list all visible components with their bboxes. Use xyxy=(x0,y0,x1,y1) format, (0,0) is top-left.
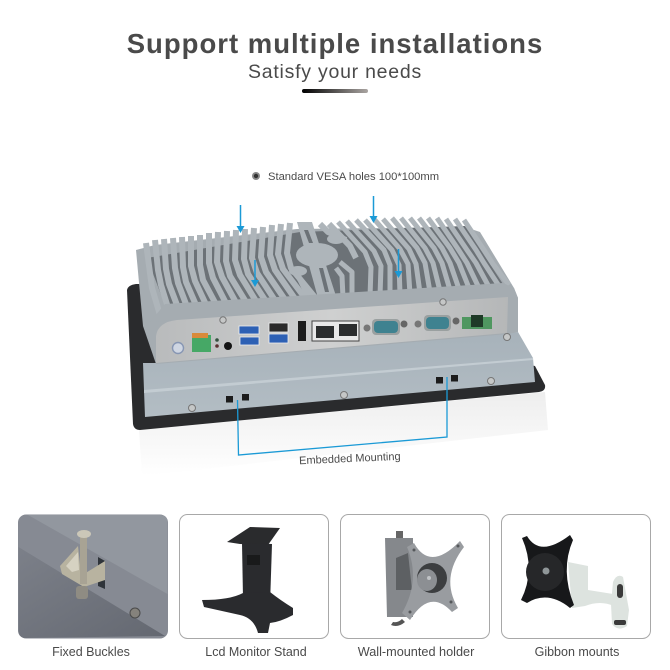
arrow 2 xyxy=(370,196,378,223)
arrows: VESA holes xyxy=(236,196,402,287)
LEDs xyxy=(215,338,219,348)
arrow 4 xyxy=(394,249,402,278)
VESA text: Standard VESA holes 100*100mm xyxy=(268,171,439,183)
embedded mounting callout xyxy=(238,377,447,467)
VESA callout label xyxy=(252,171,439,183)
panel: wall-mounted holder xyxy=(340,514,490,659)
card xyxy=(340,514,490,638)
I/O ports xyxy=(172,315,492,354)
black bezel xyxy=(127,284,545,430)
caption: Gibbon mounts xyxy=(535,645,619,659)
icon: wall bracket xyxy=(385,531,464,626)
central heatsink spine and oval xyxy=(289,222,345,298)
DC connector xyxy=(462,315,492,329)
heatsink fins xyxy=(146,223,356,315)
bracket line xyxy=(238,377,447,455)
card photo xyxy=(18,514,168,638)
card xyxy=(502,514,650,638)
power button xyxy=(172,342,184,354)
screws xyxy=(188,299,510,412)
panel: gibbon mounts xyxy=(502,514,650,659)
floor reflection xyxy=(139,392,548,476)
USB blue ports xyxy=(239,326,288,345)
subtitle: Satisfy your needs xyxy=(248,61,422,83)
caption: Fixed Buckles xyxy=(52,645,130,659)
icon: VESA hole bullet xyxy=(252,172,260,180)
COM ports xyxy=(364,315,460,335)
icon: buckle xyxy=(60,530,140,618)
audio jack xyxy=(224,342,232,350)
icon: articulated arm xyxy=(521,535,629,629)
HDMI port xyxy=(298,321,306,341)
LAN ports xyxy=(312,321,359,341)
title: Support multiple installations xyxy=(127,28,543,59)
arrow 1 xyxy=(236,205,244,233)
card xyxy=(180,514,328,638)
rear plate xyxy=(143,332,535,417)
heatsink fins, right half xyxy=(297,218,509,300)
silver I/O panel xyxy=(156,297,508,363)
heatsink body xyxy=(136,227,518,364)
icon: stand xyxy=(202,527,293,633)
gradient underline xyxy=(302,89,368,93)
arrow 3 xyxy=(251,260,259,287)
caption: Lcd Monitor Stand xyxy=(205,645,307,659)
bracket label: Embedded Mounting xyxy=(299,451,401,467)
panel: fixed buckles xyxy=(18,514,168,659)
USB black port xyxy=(269,323,288,332)
heatsink fin cavity xyxy=(147,226,503,305)
bottom lip of heatsink xyxy=(150,283,518,322)
panel: LCD monitor stand xyxy=(180,514,328,659)
product: panel PC rear view xyxy=(127,218,548,476)
heading block xyxy=(127,28,543,93)
caption: Wall-mounted holder xyxy=(358,645,475,659)
embedded mounting slots xyxy=(226,375,458,402)
terminal block green xyxy=(192,333,211,352)
